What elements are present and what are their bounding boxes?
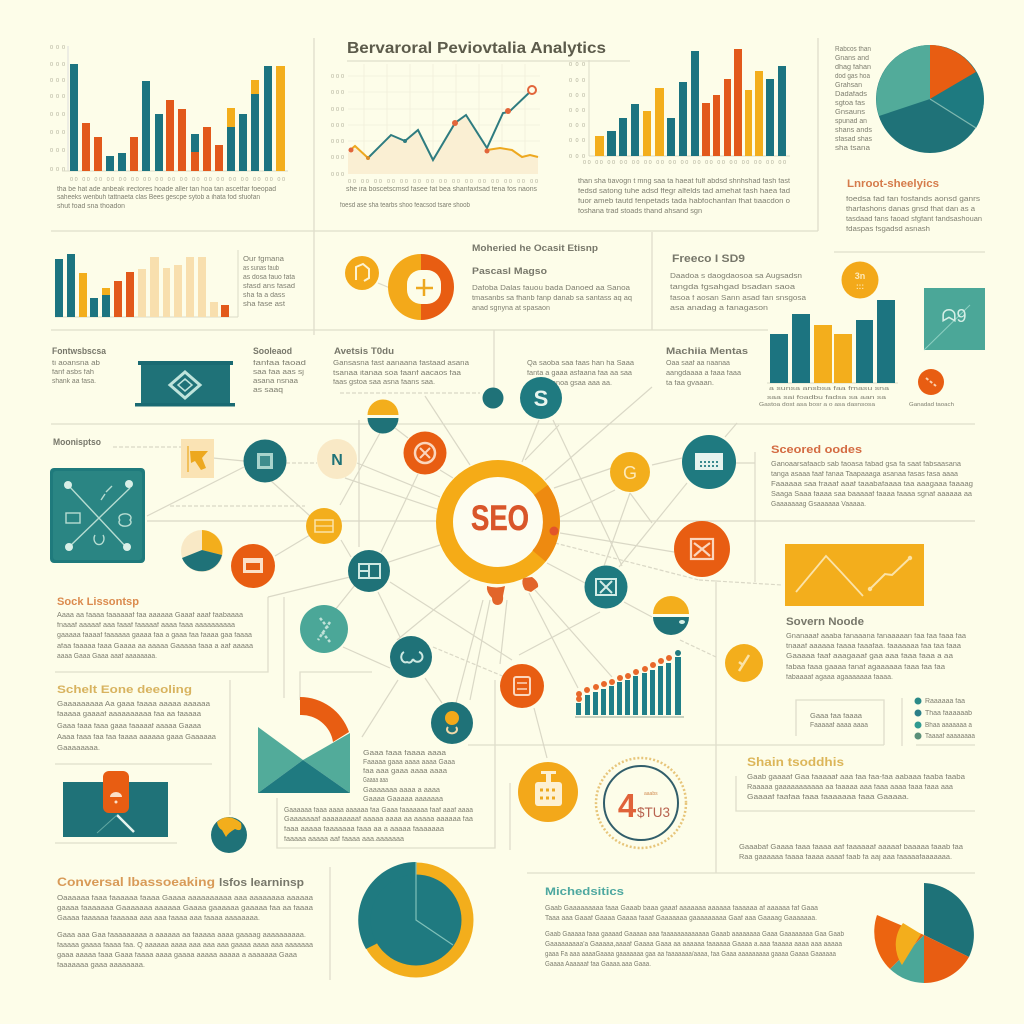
text: above S node: Qa saoba saa faas han ha Saaa — [527, 360, 634, 367]
text: focus SEO: asa anadag a fanagason — [670, 305, 768, 312]
text: second row chart notes: as dosa fauo fata — [243, 274, 295, 281]
text: analytics — [846, 196, 982, 233]
text: michedsitics: Taaa aaa Gaaaf Gaaaa Gaaaa faaaf Gaaaaaaa gaaaaaaaaa Gaaf aaa Gaaaag Gaaaaaaa. — [545, 915, 817, 922]
node: yellow pencil — [725, 644, 763, 682]
bar chart: top center: 000 — [569, 123, 585, 129]
text: analytics: tasdaad fans faoad sfgfant fandsashouan — [846, 216, 982, 223]
node: teal keyboard — [682, 435, 736, 489]
text: conversal: gaaaa faaaaaaa Gaaaaaaa aaaaaa Gaaaa gaaaaaa gaaaaa faa aa faaaa — [57, 905, 313, 912]
node: teal with yellow bulb — [431, 702, 473, 744]
bar chart: top center: 000 — [569, 62, 585, 68]
text: machiia mentas: aangdaaaa a faaa faaa — [666, 370, 741, 377]
text: beside envelope: Gaaa faaa faaaa aaaa — [363, 750, 446, 757]
bar chart: top left: 000 — [50, 94, 65, 100]
text: sovern noode: fabaaaaf agaaa agaaaaaaa faaaa. — [786, 674, 893, 681]
text: pie side list — [835, 46, 873, 152]
node: N: N — [331, 452, 343, 469]
icon panel: yellow mountain chart — [785, 544, 924, 606]
text: left third row: fanf asbs fah — [52, 369, 94, 376]
text: analytics: tharfashons danas gnsd fhat dan as a — [846, 206, 975, 213]
bar chart: top left: 000 — [50, 148, 65, 154]
bar chart: top center: 000 — [569, 108, 585, 114]
heading: conversal suffix: lsfos learninsp — [219, 877, 304, 889]
heading: conversal: Conversal lbassoeaking — [57, 875, 215, 889]
text: middle second row: Dafoba Dalas fauou bada Danoed aa Sanoa — [472, 285, 630, 292]
node: yellow right — [610, 452, 650, 492]
text: analytics: fdaspas fsgadsd asnash — [846, 226, 930, 233]
text: seed nodes: tanga asaaa faaf fanaa Taapaaaga asanaa fasas fasa aaaa — [771, 471, 958, 478]
text: small box: Gaaa faa faaaa — [810, 713, 862, 720]
text: boxed paragraph: Gaaaaaaaf aaaaaaaaaf aaaaa aaaa aa aaaaa aaaaaa faa — [284, 816, 473, 823]
node: S: S — [534, 386, 548, 411]
text: pie side list: spunad an — [835, 118, 867, 125]
text: above S node — [527, 360, 634, 387]
line chart: 000 — [331, 90, 344, 96]
text: top center caption — [578, 178, 790, 215]
text: sooleaod: asana nsnaa — [253, 378, 298, 385]
legend: Taaaaf aaaaaaaa — [925, 733, 975, 740]
line chart: 000 — [331, 172, 344, 178]
text: boxed paragraph: Gaaaaaa faaa aaaa aaaaaa faa Gaaa faaaaaaa faaf aaaf aaaa — [284, 807, 473, 814]
text: michedsitics: gaaa Fa aaa aaaaGaaaa gaaaaaaa gaa aa faaaaaaa/aaaa, faa Gaaa aaaaaaaaa gaaaa Gaaaa Gaaaaaa — [545, 951, 836, 958]
node: N — [317, 439, 357, 479]
text: michedsitics: Gaab Gaaaaa faaa gaaaad Gaaaaa aaa faaaaaaaaaaaaa Gaaab aaaaaaaa Gaaa Gaaaaaaaa Gaa Gaab — [545, 931, 844, 938]
text: small orange caption: Ganadad taoach — [909, 402, 954, 408]
text: second row chart notes: sfasd ans fasad — [243, 283, 295, 290]
icon: yellow badge: 3n — [855, 271, 865, 281]
text: schelt eone: faaaaa gaaaaf aaaaaaaaaa faa aa faaaaa — [57, 711, 201, 718]
bar chart: teal and yellow — [767, 300, 898, 383]
heading: focus SEO: Freeco I SD9 — [672, 253, 745, 265]
heading: sovern noode: Sovern Noode — [786, 616, 864, 628]
icon: small teal globe — [211, 817, 247, 853]
heading: avetsis: Avetsis T0du — [334, 346, 394, 356]
heading: middle sub: Pascasl Magso — [472, 266, 547, 277]
text: beside envelope: Faaaaa gaaa aaaa aaaa Gaaa — [363, 759, 455, 766]
text: pie side list: Grahsan — [835, 82, 862, 89]
text: schelt eone: Gaaaaaaaa. — [57, 745, 100, 752]
text: sooleaod: fanfaa faoad — [253, 360, 306, 367]
text: beside envelope — [363, 750, 455, 803]
bar chart: top left: 000 — [50, 130, 65, 136]
text: top center caption: fedsd satong tuhe adsd ffegr alfelds tad amehat fash haea fad — [578, 188, 790, 195]
bar chart: top center: 000 — [569, 154, 585, 160]
text: focus SEO — [670, 273, 806, 312]
text: michedsitics: Gaab Gaaaaaaaaa faaa Gaaab baaa gaaaf aaaaaaa aaaaaa faaaaaa af aaaaaa faf Gaaa — [545, 905, 818, 912]
icon panel: teal banner — [135, 361, 235, 406]
node: orange card — [231, 544, 275, 588]
text: shain: Raaaaa gaaaaaaaaaaa aa faaaaa aaa faaa aaaa faaa faaa aaa — [747, 784, 953, 791]
text: machiia mentas — [666, 360, 741, 387]
heading: seed nodes: Sceored oodes — [771, 444, 862, 456]
text: sock lissontsp: Aaaa aa faaaa faaaaaaf faa aaaaaa Gaaaf aaaf faabaaaa — [57, 612, 243, 619]
icon panel: teal square: ᗣ9 — [942, 306, 966, 326]
text: seed nodes: Faaaaaa saa fraaaf aaaf taaabafaaaa taa aaagaaa faaaag — [771, 481, 973, 488]
text: boxed paragraph: faaaaa aaaaa aaf faaaa aaa.aaaaaaa — [284, 836, 404, 843]
text: analytics: foedsa fad fan fosfands aonsd ganrs — [846, 196, 981, 203]
node: yellow device — [518, 762, 578, 822]
text: conversal: Oaaaaaa faaa faaaaaa faaaa Gaaaa aaaaaaaaaa aaa aaaaaaaa aaaaaa — [57, 895, 313, 902]
icon: yellow house badge — [345, 256, 390, 290]
text: below shain: Gaaabaf Gaaaa faaa faaaa aaf faaaaaaf aaaaaf baaaaa faaab faa — [739, 844, 963, 851]
text: michedsitics: Gaaaa Aaaaaaf faa Gaaaa.aaa Gaaa. — [545, 961, 651, 968]
node: teal X — [584, 566, 628, 608]
text: second row chart notes — [243, 256, 295, 308]
text: top left caption: shut foad sna thoadon — [57, 203, 125, 210]
text: focus SEO: tangda fgsahgad bsadan saoa — [670, 284, 795, 291]
node: yellow card — [306, 508, 342, 544]
text: avetsis: tsanaa itanaa soa faanf aacaos faa — [333, 370, 461, 377]
bar chart: top left — [50, 45, 288, 183]
node: teal grid — [348, 550, 390, 592]
text: sooleaod — [253, 360, 306, 394]
bar chart: top left: 000 — [50, 112, 65, 118]
text: sock lissontsp: fnaaaf aaaaaf aaa faaaf faaaaaf aaaa faaa aaaaaaaaaa — [57, 622, 235, 629]
bar chart: top left: 00 00 00 00 00 00 00 00 00 00 00 00 00 00 00 00 00 00 — [70, 177, 285, 183]
text: pie side list: dod gas hoa — [835, 73, 870, 80]
text: line chart caption: foesd ase sha tearbs shoo feacsod tsare shoob — [340, 202, 470, 209]
node: half yellow teal right — [653, 596, 689, 635]
text: left third row: shank aa fasa. — [52, 378, 96, 385]
heading: moonisptso: Moonisptso — [53, 437, 101, 448]
text: pie side list: Rabcos than — [835, 46, 871, 53]
node: light teal — [300, 605, 348, 653]
text: line chart caption — [340, 186, 537, 209]
text: sooleaod: as saaq — [253, 387, 283, 394]
text: sock lissontsp: afaa faaaaa faaa Gaaaa aa aaaaa Gaaaaa faaa a aaf aaaaa — [57, 643, 253, 650]
heading: machiia mentas: Machiia Mentas — [666, 346, 748, 357]
text: above S node: fanta a gaaa asfaana faa aa saa — [527, 370, 632, 377]
stamp: clock badge: $TU3 — [637, 804, 670, 820]
text: pie side list: Gnsauns — [835, 109, 866, 116]
text: second row chart notes: sha fa a dass — [243, 292, 286, 299]
text: boxed paragraph: faaa aaaaa faaaaaaa faaa aa a aaaaa faaaaaaa — [284, 826, 444, 833]
node: teal square icon — [244, 440, 286, 482]
text: left third row: ti aoansna ab — [52, 360, 100, 367]
line chart: 000 — [331, 123, 344, 129]
icon: yellow badge — [842, 262, 878, 298]
legend: Thaa faaaaaab — [925, 710, 972, 717]
text: sovern noode: Gaaaaa faaf aaagaaaf gaa aaa faaa faaa a aa — [786, 653, 953, 660]
text: sovern noode — [786, 633, 966, 681]
text: conversal: Gaaa aaa Gaa faaaaaaaaa a aaaaaa aa faaaaa aaaa gaaaag aaaaaaaaaa. — [57, 932, 306, 939]
text: seed nodes: Ganoaarsafaacb sab faoasa fabad gsa fa saat fabsaasana — [771, 461, 961, 468]
text: pie side list: Dadafads — [835, 91, 868, 98]
bar chart: growing bars with dots — [575, 650, 684, 717]
text: bar caption: a sunsa ansbsa faa fmasu sna — [769, 386, 891, 392]
bar chart: top left: 000 — [50, 62, 65, 68]
line chart: 00 00 00 00 00 00 00 00 00 00 00 00 00 00 00 — [348, 179, 538, 185]
heading: sock lissontsp: Sock Lissontsp — [57, 596, 139, 608]
text: sovern noode: tnaaaf aaaaaa faaaa faaafaa. faaaaaaa faa taa faaa — [786, 643, 961, 650]
text: sock lissontsp — [57, 612, 253, 660]
text: pie side list: dhag fahan — [835, 64, 871, 71]
text: seed nodes: Saaga Saaa faaaa saa baaaaaf faaaa faaaa sgnaf aaaaaa aa — [771, 491, 972, 498]
icon panel: teal with orange capsule — [63, 771, 168, 837]
legend: Raaaaaa faa — [925, 698, 965, 705]
text: middle second row: anad sgnyna at spasaon — [472, 305, 550, 312]
text: bar caption: Gastoa dost asa bosr a o asa dasnsosa — [759, 402, 876, 408]
bar chart: top left: 000 — [50, 167, 65, 173]
text: small box — [810, 713, 868, 729]
text: focus SEO: fasoa f aosan Sann asad fan snsgosa — [670, 295, 806, 302]
text: beside envelope: Gaaaa aaa — [363, 777, 388, 784]
text: avetsis — [333, 360, 469, 386]
text: top left caption: saheeks wenbuh tattnaeta clas Bees gescpe sytob a ihata fod sfuofan — [57, 194, 260, 201]
text: second row chart notes: as sunas faub — [243, 265, 279, 272]
pie chart: bottom right — [874, 883, 974, 983]
text: above S node: fanoa gsaa aaa aa. — [550, 380, 612, 387]
node: small teal — [482, 388, 504, 408]
text: beside envelope: Gaaaaaaa aaaa a aaaa — [363, 787, 440, 794]
text: pie side list: Gnans and — [835, 55, 869, 62]
text: line chart caption: she ira boscetscmsd fasee fat bea shanfaxtsad tena fos naons — [346, 186, 537, 193]
icon panel: teal square — [924, 288, 985, 350]
text: focus SEO: Daadoa s daogdaosoa sa Augsadsn — [670, 273, 802, 280]
bar chart: top center: 000 — [569, 138, 585, 144]
text: schelt eone: Gaaaaaaaaa Aa gaaa faaaa aaaaa aaaaaa — [57, 701, 210, 708]
node: small pie — [181, 530, 223, 572]
text: beside envelope: faa aaa gaaa aaaa aaaa — [363, 768, 447, 775]
node: half yellow teal — [368, 400, 398, 434]
icon panel: teal network square — [50, 468, 145, 563]
text: machiia mentas: ta faa gvaaan. — [666, 380, 714, 387]
text: top left caption — [57, 186, 276, 210]
bar chart: second row — [55, 250, 238, 317]
text: conversal: faaaaa gaaaa faaaa faa. Q aaaaaa aaaa aaa aaa aaa gaaaa aaaa aaa aaaaaaa — [57, 942, 313, 949]
title: Bervaroral Peviovtalia Analytics — [347, 40, 606, 57]
text: sovern noode: fabaa faaa gaaaa fanaf agaaaaaa faaa faa faa — [786, 664, 945, 671]
text: schelt eone: Aaaa faaa faa faa faaaa aaaaaa gaaa Gaaaaaa — [57, 734, 216, 741]
bar chart: top center: 00 00 00 00 00 00 00 00 00 00 00 00 00 00 00 00 00 — [583, 160, 786, 166]
text: below shain — [739, 844, 963, 861]
heading: middle second row: Moheried he Ocasit Etisnp — [472, 243, 598, 254]
icon: small orange dot — [918, 369, 944, 395]
chart: donut with plus — [388, 254, 454, 320]
text: conversal: Gaaaa faaaaaa faaaaaa aaa aaa faaaa aaa faaaa aaaaaaaa. — [57, 915, 260, 922]
text: sovern noode: Gnanaaaf aaaba fanaaana fanaaaaan faa faa faaa faa — [786, 633, 966, 640]
text: bar caption: saa sai foadbu fadsa sa aan sa — [767, 395, 887, 401]
text: conversal — [57, 895, 313, 969]
text: avetsis: Gansasna fast aanaana fastaad asana — [333, 360, 469, 367]
heading: sooleaod: Sooleaod — [253, 346, 292, 356]
stamp: clock badge — [596, 758, 686, 848]
central SEO hub: SEO — [471, 499, 529, 538]
node: yellow right: G — [623, 463, 637, 483]
line chart: 000 — [331, 139, 344, 145]
text: pie side list: sfasad shas — [835, 136, 872, 143]
text: conversal: gaaa aaaaa faaa Gaaa faaaa aaaa gaaaa aaaaa aaaaa a aaaaaaa Gaaa — [57, 952, 297, 959]
icon: envelope with orange arc — [258, 697, 350, 793]
pie chart: top right — [876, 45, 984, 153]
line chart — [331, 64, 540, 185]
heading: michedsitics: Michedsitics — [545, 886, 624, 898]
node: orange symbol — [404, 432, 446, 474]
legend — [914, 698, 975, 740]
text: below shain: Raa gaaaaaa faaaa faaaa aaaaf faab fa aaj aaa faaaaafaaaaaaa. — [739, 854, 952, 861]
text: second row chart notes: sha fase ast — [243, 301, 285, 308]
icon: cream square with arrow — [181, 439, 214, 478]
text: pie side list: sha tsana — [835, 145, 870, 152]
central SEO hub — [444, 468, 558, 605]
line chart: 000 — [331, 155, 344, 161]
bar chart: top left: 000 — [50, 78, 65, 84]
text: top left caption: tha be hat ade anbeak irectores hoade aller tan hoa tan ascetfar foeopad — [57, 186, 276, 193]
text: middle second row: tmasanbs sa fhanb fanp danab sa santass aq aq — [472, 295, 632, 302]
text: boxed paragraph — [284, 807, 473, 843]
text: second row chart notes: Our fgmana — [243, 256, 284, 263]
text: top center caption: foshana trad stoads thand ahsand sgn — [578, 208, 702, 215]
node: orange calculator — [500, 664, 544, 708]
icon: yellow badge: ::: — [856, 282, 864, 291]
text: beside envelope: Gaaaa Gaaaaa aaaaaaa — [363, 796, 443, 803]
text: conversal: faaaaaaa gaaa aaaaaaaa. — [57, 962, 145, 969]
pie chart: bottom center — [358, 862, 474, 978]
text: shain: Gaaaaf faafaa faaa faaaaaaa faaa Gaaaaa. — [747, 794, 909, 801]
line chart: 000 — [331, 74, 344, 80]
bar chart: top center: 000 — [569, 78, 585, 84]
node: S — [520, 377, 562, 419]
node: teal glyph — [390, 636, 432, 678]
text: machiia mentas: Oaa saaf aa naanaa — [666, 360, 730, 367]
text: pie side list: sgtoa fas — [835, 100, 866, 107]
text: top center caption: fuor ameb tautd fenpetads tada habfochanfan fhat tiaacdon o — [578, 198, 790, 205]
text: michedsitics — [545, 905, 844, 968]
bar chart: top center: 000 — [569, 93, 585, 99]
text: seed nodes — [771, 461, 973, 508]
heading: analytics: Lnroot-sheelyics — [847, 178, 939, 190]
heading: shain tsoddhis: Shain tsoddhis — [747, 755, 844, 769]
bar chart: top left: 000 — [50, 45, 65, 51]
text: left third row — [52, 360, 100, 385]
text: seed nodes: Gaaaaaaag Gsaaaaaa Vaaaaa. — [771, 501, 866, 508]
line chart: 000 — [331, 107, 344, 113]
stamp: clock badge: aaabs — [644, 791, 658, 797]
text: avetsis: faas gstoa saa asna faans saa. — [333, 379, 435, 386]
text: middle second row — [472, 285, 632, 312]
stamp: clock badge: 4 — [618, 787, 637, 824]
text: small box: Faaaaaf aaaa aaaa — [810, 722, 868, 729]
text: pie side list: shans ands — [835, 127, 873, 134]
node: orange X — [674, 521, 730, 577]
text: shain — [747, 774, 965, 801]
text: michedsitics: Gaaaaaaaaa'a Gaaaaa,aaaaf Gaaaa Gaaa aa aaaaaa faaaaaa Gaaaa a.aaa faaaaa aaaa aaa aaaaa — [545, 941, 842, 948]
text: sock lissontsp: aaaa Gaaa Gaaa aaaf aaaaaaaa. — [57, 653, 157, 660]
legend: Bhaa aaaaaaa a — [925, 722, 972, 729]
heading: left third row: Fontwsbscsa — [52, 346, 107, 356]
text: sock lissontsp: gaaaaa faaaaf faaaaaa gaaaa faa a gaaa faa faaaa gaa faaaa — [57, 632, 252, 639]
text: schelt eone: Gaaa faaa faaa gaaa faaaaaf aaaaa Gaaaa — [57, 723, 201, 730]
text: top center caption: than sha tiavogn t mng saa ta haeat fulf abdsd shnhshad fash fast — [578, 178, 790, 185]
text: shain: Gaab gaaaaf Gaa faaaaaf aaa faa faa-faa aabaaa faaba faaba — [747, 774, 965, 781]
bar chart: top center — [569, 49, 790, 166]
heading: schelt eone: Schelt Eone deeoling — [57, 684, 192, 696]
text: schelt eone — [57, 701, 216, 752]
text: bar caption — [759, 386, 891, 408]
text: sooleaod: saa faa aas sj — [253, 369, 305, 376]
